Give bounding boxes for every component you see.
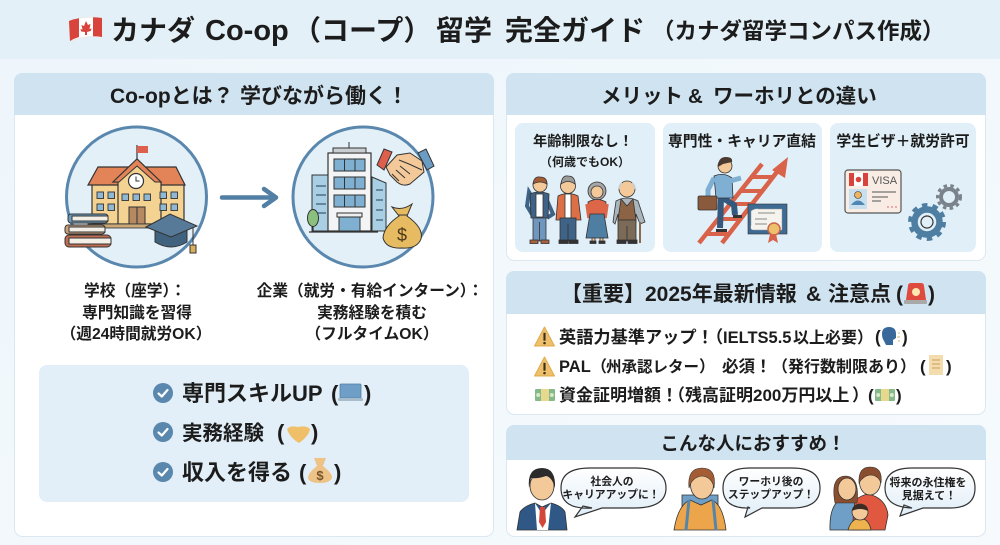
speech bubble: step up: ステップアップ！ bbox=[728, 488, 814, 501]
benefit: income: ( bbox=[299, 460, 307, 485]
benefit: experience: ( bbox=[277, 420, 285, 445]
item: PAL: ) bbox=[946, 357, 952, 376]
benefit: skill up: 専門スキルUP bbox=[182, 381, 323, 406]
panel heading: Co-op: Co-opとは？ bbox=[110, 85, 234, 108]
title: （コープ） bbox=[293, 15, 431, 46]
speech bubble: step up: ワーホリ後の bbox=[739, 474, 803, 488]
panel heading: recommended: こんな人におすすめ！ bbox=[660, 433, 846, 454]
item: funds bbox=[535, 385, 902, 405]
panel heading: Co-op bbox=[14, 73, 494, 115]
title: 完全ガイド bbox=[505, 15, 645, 46]
panel heading: important: 2025年最新情報 bbox=[645, 283, 797, 306]
icon: company circle bbox=[293, 127, 434, 267]
panel heading: merits: ワーホリとの違い bbox=[713, 85, 877, 108]
benefit: experience bbox=[153, 420, 318, 445]
item: PAL: ） bbox=[699, 358, 715, 376]
item: funds: 資金証明増額！ bbox=[559, 385, 678, 405]
panel: recommended for bbox=[506, 425, 986, 536]
speech bubble: career up bbox=[561, 468, 666, 517]
panel: benefits list bbox=[39, 365, 469, 502]
card: career: 専門性・キャリア直結 bbox=[668, 132, 816, 150]
text block: company: 企業（就労・有給インターン）： bbox=[257, 281, 483, 300]
item: English requirement: IELTS5.5 bbox=[723, 329, 791, 347]
text block: school: 専門知識を習得 bbox=[82, 303, 192, 322]
speech bubble: step up bbox=[723, 468, 820, 517]
subtitle: （カナダ留学コンパス作成） bbox=[652, 18, 945, 44]
icon: gears bbox=[910, 186, 960, 239]
item: PAL: （ bbox=[772, 358, 788, 376]
benefit: skill up: ( bbox=[331, 381, 339, 406]
title: Co-op bbox=[205, 15, 289, 47]
icon: four people bbox=[527, 176, 645, 244]
item: PAL: PAL bbox=[559, 358, 591, 376]
panel heading: important: 【重要】 bbox=[561, 283, 645, 306]
card: no age limit: 年齢制限なし！ bbox=[533, 132, 633, 150]
item: English requirement: ( bbox=[875, 327, 881, 347]
persona: family bbox=[830, 467, 888, 530]
benefit: experience: ) bbox=[311, 420, 318, 445]
card: student visa bbox=[830, 123, 976, 252]
panel heading: Co-op: 学びながら働く！ bbox=[240, 84, 408, 108]
text block: company: 実務経験を積む bbox=[317, 304, 427, 322]
item: funds: ） bbox=[852, 386, 869, 405]
benefit: income bbox=[153, 458, 341, 485]
speech bubble: permanent residency: 見据えて！ bbox=[902, 488, 956, 502]
title: 留学 bbox=[436, 15, 492, 46]
panel heading: merits: & bbox=[688, 85, 703, 108]
icon: visa card: VISA bbox=[872, 175, 898, 187]
panel heading: important: ) bbox=[928, 283, 935, 306]
title: カナダ bbox=[111, 14, 195, 46]
card: no age limit: ） bbox=[618, 155, 630, 169]
item: English requirement: （ bbox=[706, 327, 723, 347]
speech bubble: career up: 社会人の bbox=[590, 474, 634, 488]
item: PAL: 必須！ bbox=[722, 357, 772, 376]
panel heading: important: ( bbox=[896, 283, 903, 306]
icon: certificate bbox=[748, 204, 787, 243]
item: English requirement bbox=[535, 327, 908, 347]
item: English requirement: ) bbox=[902, 327, 908, 347]
benefit: skill up bbox=[153, 381, 371, 406]
header band bbox=[0, 0, 1000, 59]
icon: books bbox=[65, 214, 111, 247]
text block: school: 学校（座学）： bbox=[84, 281, 186, 300]
persona: backpacker bbox=[674, 468, 726, 530]
item: English requirement: ） bbox=[857, 329, 873, 347]
icon: handshake bbox=[377, 149, 434, 185]
panel heading: merits: メリット bbox=[601, 85, 683, 108]
card: career bbox=[663, 123, 822, 252]
panel heading: recommended bbox=[506, 425, 986, 460]
icon: money bag: $ bbox=[397, 225, 407, 245]
card: no age limit: OK bbox=[600, 155, 618, 169]
card: no age limit: 何歳でも bbox=[552, 154, 600, 169]
card: student visa: 学生ビザ＋就労許可 bbox=[836, 132, 970, 150]
icon: siren bbox=[904, 283, 927, 304]
icon: visa card bbox=[845, 170, 901, 213]
card: no age limit: （ bbox=[540, 155, 552, 169]
item: funds: 残高証明200万円以上 bbox=[685, 385, 849, 405]
item: funds: ) bbox=[896, 386, 902, 405]
text block: school bbox=[61, 281, 211, 343]
icon: ladder arrow and climber bbox=[698, 157, 788, 243]
benefit: income: 収入を得る bbox=[182, 460, 292, 485]
icon: school circle bbox=[65, 127, 206, 267]
benefit: experience: 実務経験 bbox=[182, 422, 264, 445]
speech bubble: permanent residency bbox=[885, 468, 975, 516]
panel: what is co-op bbox=[14, 73, 494, 536]
benefit: income: $ bbox=[316, 468, 324, 483]
speech bubble: permanent residency: 将来の永住権を bbox=[890, 475, 966, 489]
item: English requirement: 以上必要 bbox=[793, 329, 857, 347]
item: funds: （ bbox=[668, 386, 685, 405]
card: no age limit bbox=[515, 123, 655, 252]
item: PAL: ( bbox=[920, 357, 926, 376]
arrow: school to company bbox=[222, 189, 276, 206]
item: English requirement: 英語力基準アップ！ bbox=[559, 327, 714, 347]
benefit: skill up: ) bbox=[364, 381, 371, 406]
item: PAL bbox=[535, 355, 952, 376]
item: PAL: （ bbox=[591, 358, 607, 376]
icon: graduation cap bbox=[146, 214, 197, 253]
item: PAL: ） bbox=[900, 358, 916, 376]
panel heading: important: & bbox=[806, 283, 821, 306]
benefit: income: ) bbox=[334, 460, 341, 485]
icon: Canadian flag bbox=[69, 17, 102, 41]
text block: company: （フルタイムOK） bbox=[305, 325, 439, 343]
panel: important 2025 bbox=[506, 271, 986, 414]
item: PAL: 発行数制限あり bbox=[788, 358, 900, 376]
panel heading: important: 注意点 bbox=[828, 283, 891, 306]
panel heading: merits bbox=[506, 73, 986, 115]
item: PAL: 州承認レター bbox=[606, 358, 699, 376]
persona: businessperson bbox=[517, 468, 567, 530]
speech bubble: career up: キャリアアップに！ bbox=[562, 488, 660, 501]
panel heading: important bbox=[506, 271, 986, 314]
item: funds: ( bbox=[868, 386, 874, 405]
text block: company bbox=[257, 281, 483, 343]
text block: school: （週24時間就労OK） bbox=[61, 325, 211, 343]
panel: merits bbox=[506, 73, 986, 260]
icon: money bag bbox=[383, 204, 421, 248]
